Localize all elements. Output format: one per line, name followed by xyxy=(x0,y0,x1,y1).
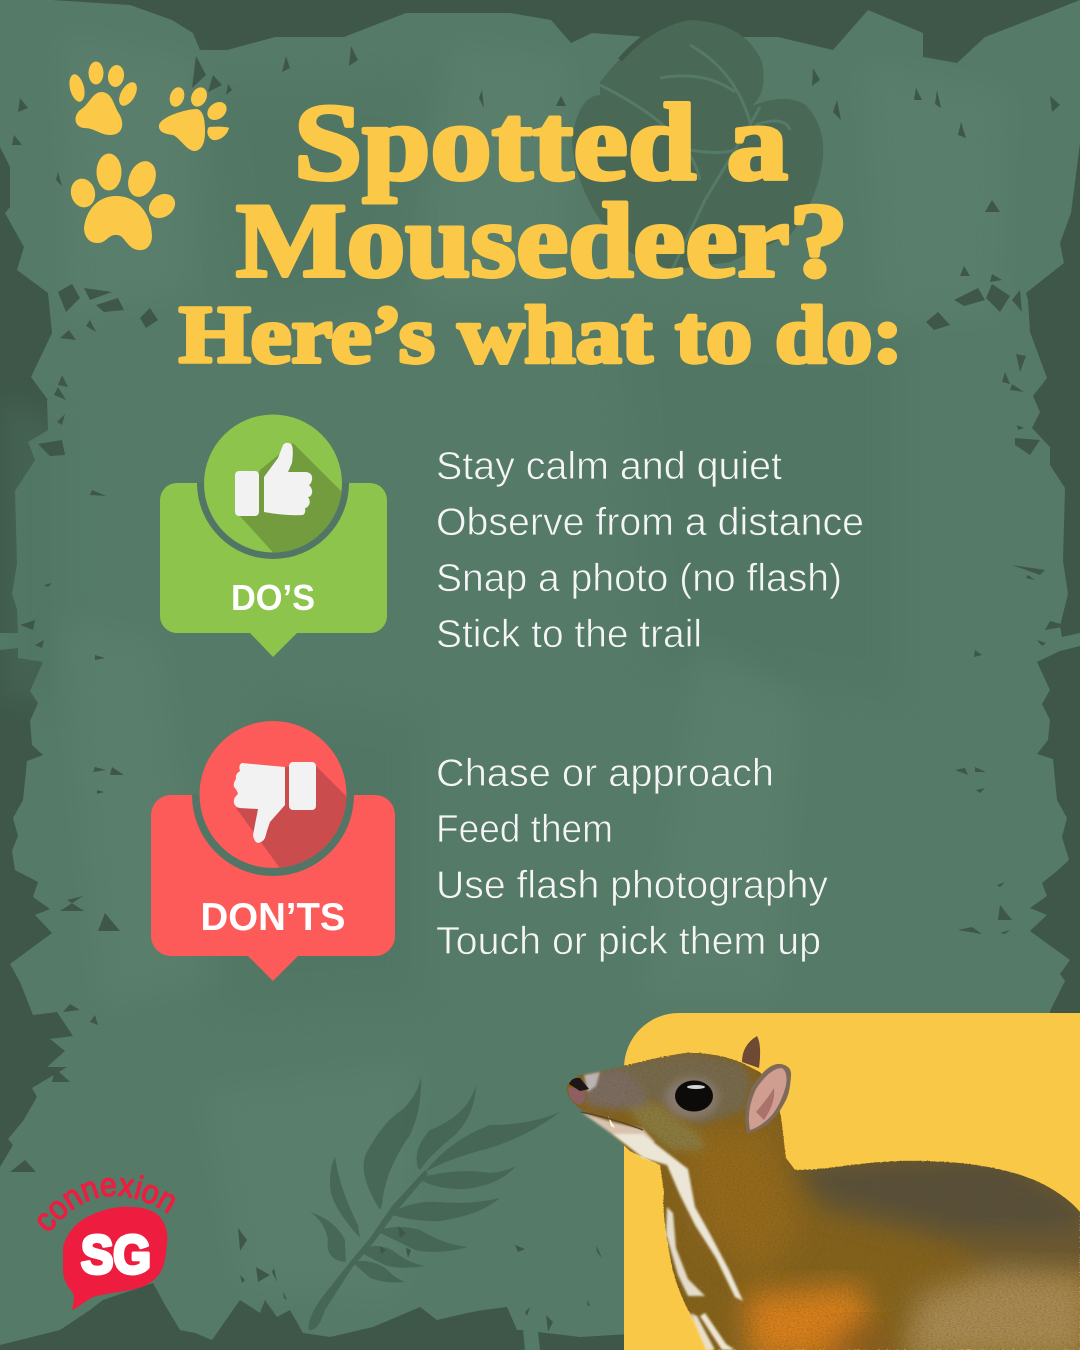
paw print: bottom xyxy=(68,154,180,250)
title xyxy=(236,82,848,299)
text block: do's list: Stay calm and quiet xyxy=(436,445,782,488)
photo: mousedeer xyxy=(567,1036,1080,1350)
background: monstera leaf xyxy=(572,17,823,270)
label: do's: DO’S xyxy=(231,577,315,618)
text block: do's list: Stick to the trail xyxy=(436,613,702,656)
paw print: top right xyxy=(159,85,230,151)
logo: connexion SG xyxy=(38,1174,176,1310)
text block: don'ts list: Feed them xyxy=(436,808,613,851)
text block: don'ts list: Touch or pick them up xyxy=(436,920,821,963)
icon: thumbs down xyxy=(234,762,346,868)
background: palm leaf xyxy=(308,1076,560,1330)
far ear xyxy=(742,1036,760,1068)
logo: connexion SG: connexion xyxy=(38,1174,176,1231)
text block: do's list: Snap a photo (no flash) xyxy=(436,557,842,600)
title: Spotted a xyxy=(294,82,788,203)
photo panel: yellow box xyxy=(624,1013,1080,1350)
text block: don'ts list xyxy=(436,752,828,963)
eye xyxy=(665,1077,719,1119)
icon: thumbs up xyxy=(235,443,345,560)
text block: do's list: Observe from a distance xyxy=(436,501,864,544)
snout and nose xyxy=(568,1072,643,1130)
white chin and throat stripes xyxy=(581,1112,743,1350)
logo: connexion SG: SG xyxy=(81,1225,151,1285)
panel: don'ts badge xyxy=(151,721,395,981)
fur body and head xyxy=(567,1052,1080,1350)
text block: don'ts list: Chase or approach xyxy=(436,752,774,795)
paw prints xyxy=(67,62,230,250)
subtitle: Here’s what to do: xyxy=(179,289,903,380)
panel: do's badge xyxy=(160,414,387,657)
paw print: top left xyxy=(67,62,141,135)
near ear xyxy=(745,1064,791,1134)
title: Mousedeer? xyxy=(236,182,848,299)
text block: do's list xyxy=(436,445,864,656)
text block: don'ts list: Use flash photography xyxy=(436,864,828,907)
label: don'ts: DON’TS xyxy=(200,896,346,939)
